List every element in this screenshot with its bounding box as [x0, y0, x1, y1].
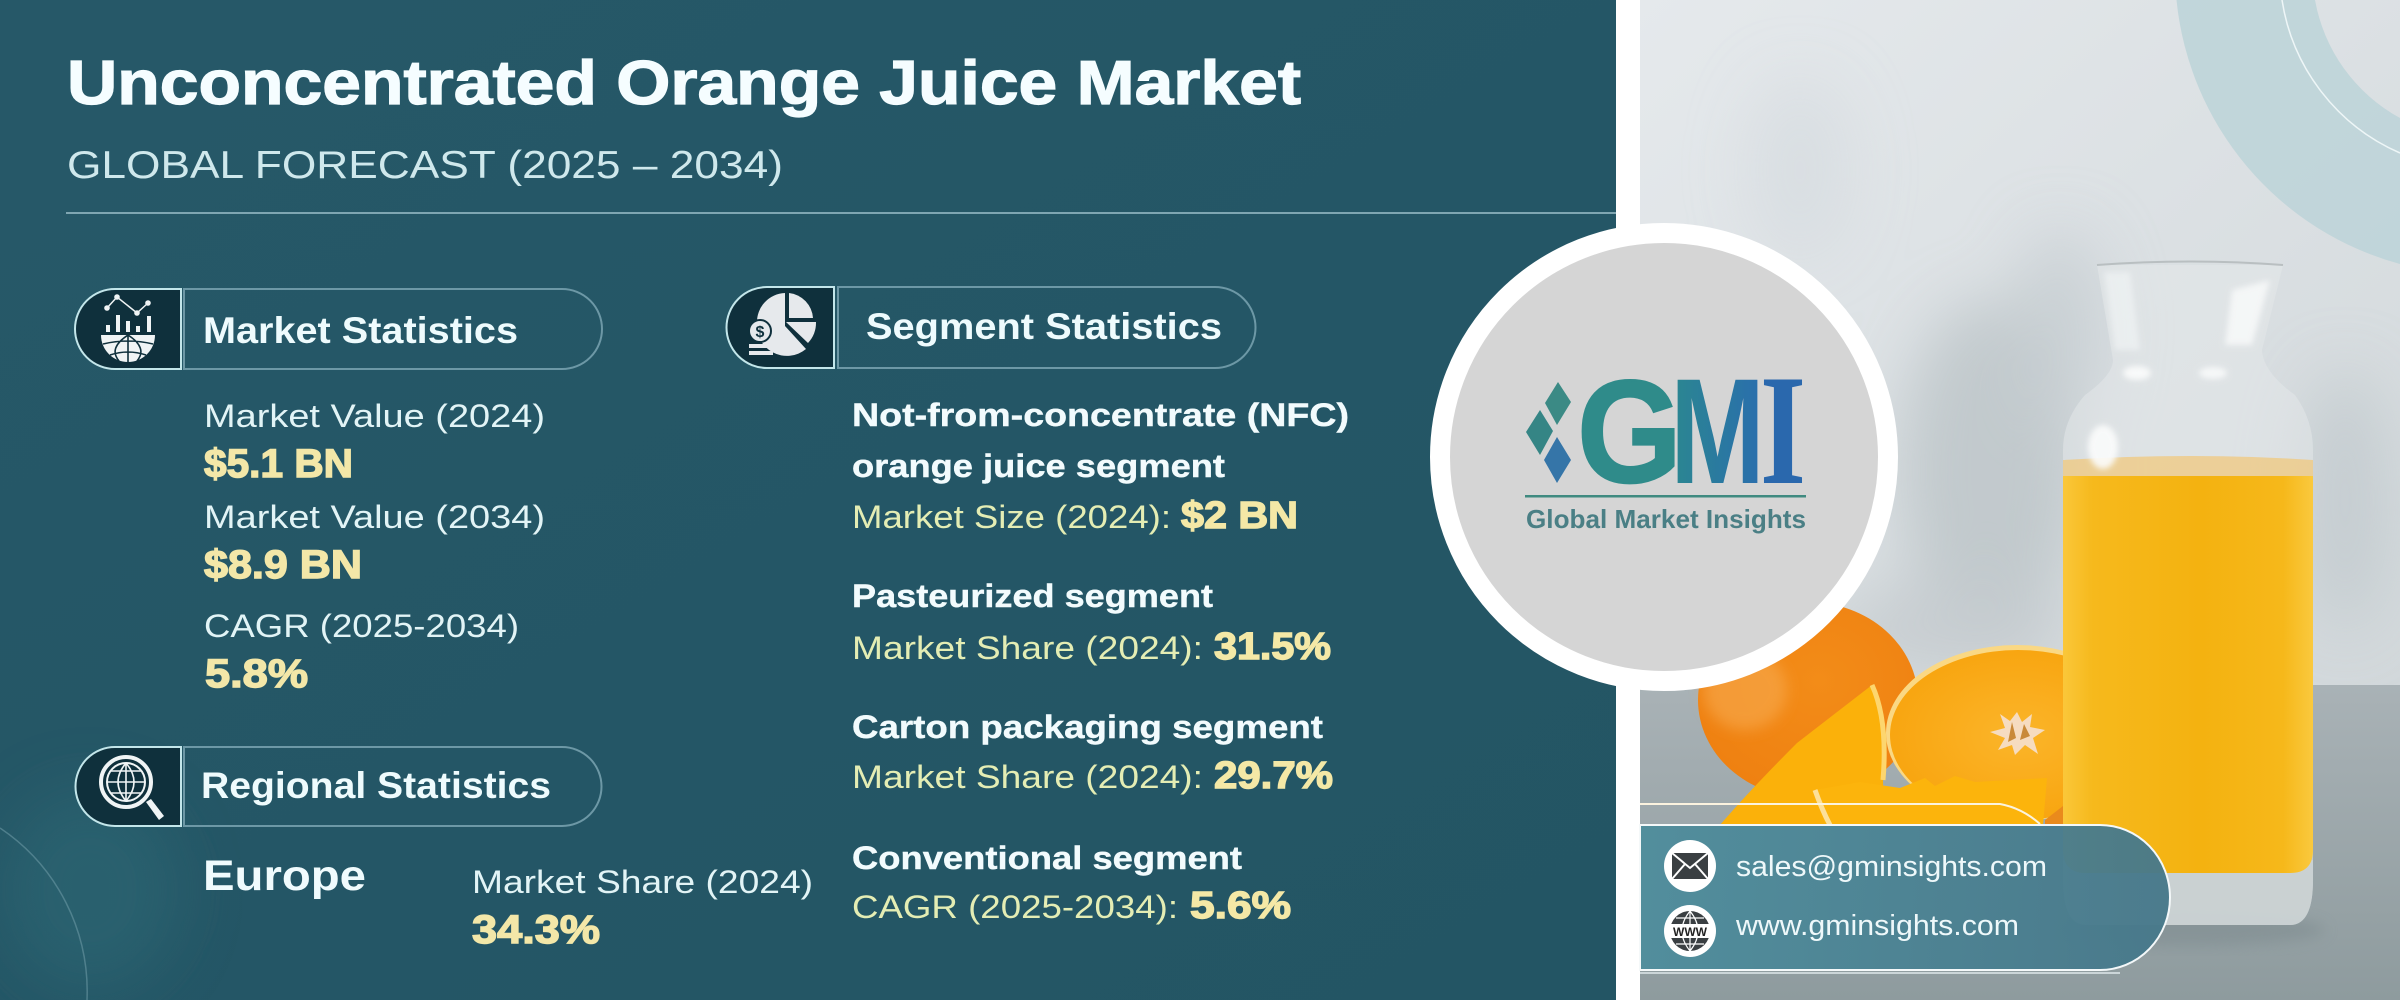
segment: not-from-concentrate — [852, 397, 1349, 537]
icon: logo diamonds — [1526, 382, 1571, 483]
segment: pasteurized: 31.5% — [1214, 626, 1331, 668]
segment: pasteurized: Market Share (2024): — [852, 630, 1203, 666]
region name: Europe: Europe — [203, 852, 366, 900]
stat: regional market share: 34.3% — [472, 908, 600, 952]
stat: CAGR: CAGR (2025-2034) — [204, 608, 519, 644]
stat: regional market share: Market Share (2024) — [472, 864, 813, 900]
stat: market value 2034: Market Value (2034) — [204, 499, 545, 535]
panel: market statistics — [75, 289, 602, 696]
segment: not-from-concentrate: orange juice segment — [852, 448, 1225, 484]
logo tagline: Global Market Insights — [1526, 504, 1806, 534]
logo wordmark: G — [1577, 350, 1682, 513]
panel: contact details — [1640, 804, 2170, 974]
heading pill: segment statistics — [838, 287, 1256, 368]
segment: not-from-concentrate: Not-from-concentrate (NFC) — [852, 397, 1349, 433]
stat: market value 2024 — [204, 398, 545, 486]
panel: regional statistics — [76, 747, 813, 952]
bottle shadow — [2156, 922, 2314, 944]
icon: globe www: WWW — [1673, 925, 1708, 939]
contact email: sales@gminsights.com — [1736, 851, 2047, 883]
contact website: www.gminsights.com — [1735, 910, 2019, 942]
segment: conventional: 5.6% — [1190, 885, 1291, 927]
stat: regional market share — [472, 864, 813, 952]
segment: carton packaging: 29.7% — [1214, 755, 1333, 797]
segment: not-from-concentrate: $2 BN — [1181, 495, 1298, 537]
heading pill: regional statistics: Regional Statistics — [201, 765, 551, 806]
segment: not-from-concentrate: Market Size (2024): — [852, 499, 1171, 535]
segment: carton packaging: Market Share (2024): — [852, 759, 1203, 795]
orange wedge — [1720, 685, 1884, 825]
segment: carton packaging — [852, 709, 1333, 797]
table surface — [1640, 685, 2400, 1000]
panel: segment statistics — [727, 287, 1349, 927]
stat: market value 2034: $8.9 BN — [204, 543, 362, 587]
stat: market value 2024: $5.1 BN — [204, 442, 353, 486]
stat: market value 2034 — [204, 499, 545, 587]
segment: pasteurized — [852, 578, 1331, 668]
title: Unconcentrated Orange Juice Market — [67, 49, 1301, 118]
heading pill: segment statistics: Segment Statistics — [866, 306, 1222, 347]
whole orange — [1698, 602, 1918, 798]
stat: market value 2024: Market Value (2024) — [204, 398, 545, 434]
icon: pie chart with coins: $ — [756, 324, 765, 341]
stat: CAGR — [204, 608, 519, 696]
panel: left teal background — [0, 0, 1616, 1000]
decorative ring, top right — [2176, 0, 2400, 264]
photo: orange juice bottle and oranges — [1640, 0, 2400, 1000]
icon: globe www — [1664, 905, 1716, 957]
stat: CAGR: 5.8% — [205, 652, 308, 696]
logo: GMI badge — [1440, 233, 1888, 681]
halved orange — [1886, 645, 2063, 820]
heading pill: regional statistics — [184, 747, 602, 826]
segment: conventional: CAGR (2025-2034): — [852, 889, 1178, 925]
heading pill: market statistics: Market Statistics — [203, 310, 518, 351]
subtitle: GLOBAL FORECAST (2025 – 2034) — [67, 144, 783, 187]
logo wordmark: I — [1760, 343, 1806, 518]
logo wordmark: M — [1670, 347, 1765, 515]
icon: market statistics globe and chart — [75, 289, 181, 369]
icon: magnifier over globe — [76, 747, 181, 826]
segment: conventional — [852, 840, 1291, 927]
glass bottle — [2063, 262, 2313, 925]
orange slice — [1815, 776, 2063, 825]
segment: conventional: Conventional segment — [852, 840, 1242, 876]
segment: pasteurized: Pasteurized segment — [852, 578, 1213, 614]
logo wordmark — [1577, 343, 1806, 518]
icon: pie chart with coins — [727, 287, 834, 368]
heading pill: market statistics — [184, 289, 602, 369]
segment: carton packaging: Carton packaging segment — [852, 709, 1323, 745]
icon: mail — [1664, 840, 1716, 892]
